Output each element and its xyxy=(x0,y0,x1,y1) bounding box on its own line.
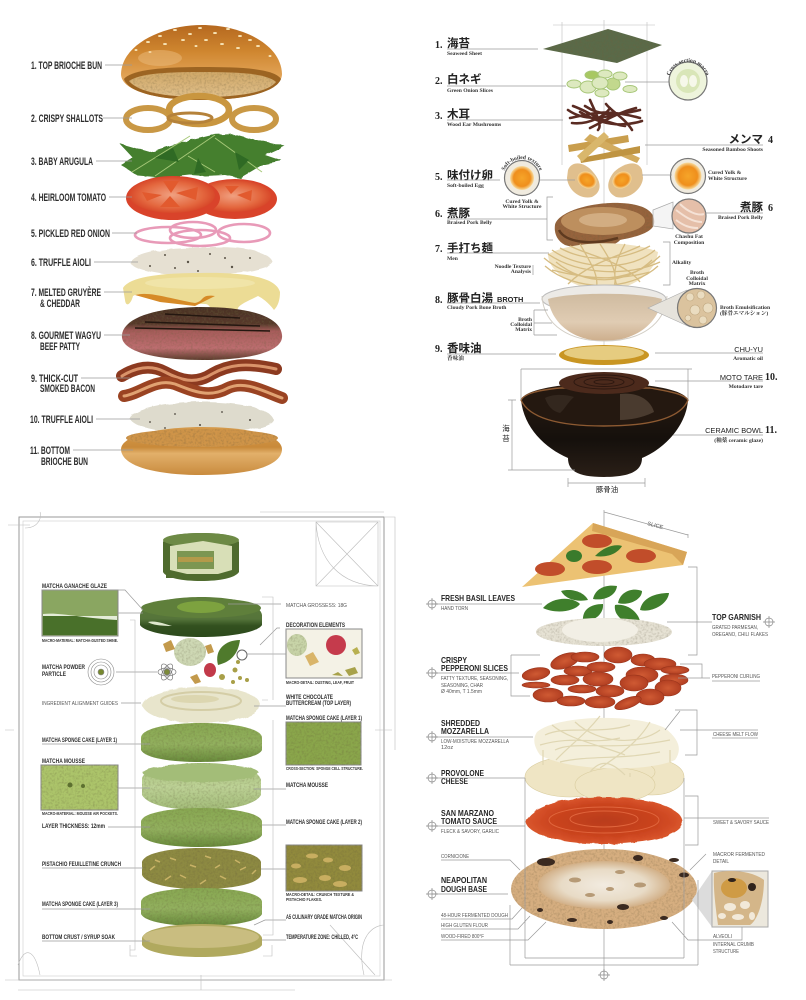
labels: ramen right: Matrix xyxy=(689,281,706,287)
inset: crunch macro xyxy=(286,845,362,891)
inset: sponge macro xyxy=(286,722,361,765)
icon: soft-boiled egg halves xyxy=(567,163,643,198)
labels: matcha: MATCHA MOUSSE xyxy=(286,782,328,789)
icon: cut matcha mini cake xyxy=(163,533,239,581)
labels: burger: 4. HEIRLOOM TOMATO xyxy=(31,192,106,204)
labels: pizza: 12oz xyxy=(441,745,453,751)
labels: pizza: FRESH BASIL LEAVES xyxy=(441,594,515,603)
labels: matcha: BUTTERCREAM (TOP LAYER) xyxy=(286,700,351,707)
labels: matcha: MACRO-DETAIL: CRUNCH TEXTURE & xyxy=(286,892,355,897)
labels: pizza: SLICE xyxy=(646,521,664,531)
icon: crispy shallots xyxy=(126,96,276,130)
labels: ramen right: Cross-section macro xyxy=(666,58,708,76)
labels: burger: 10. TRUFFLE AIOLI xyxy=(30,414,93,426)
labels: ramen right: Seasoned Bamboo Shoots xyxy=(702,147,764,153)
labels: matcha: MATCHA SPONGE CAKE (LAYER 2) xyxy=(286,819,362,826)
labels: ramen right: 海 xyxy=(502,424,510,433)
icon: ceramic bowl with tare xyxy=(521,372,688,477)
labels: pizza: TOP GARNISH xyxy=(712,613,761,622)
labels: matcha: PARTICLE xyxy=(42,671,66,678)
labels: pizza: SHREDDED xyxy=(441,719,480,728)
panel: pizza xyxy=(426,510,775,981)
labels: ramen right: Noodle Texture xyxy=(495,264,532,270)
labels: ramen right: 11. xyxy=(765,425,777,436)
labels: matcha: CROSS-SECTION: SPONGE CELL STRUCTURE. xyxy=(286,766,363,771)
icon: matcha ganache glaze layer xyxy=(140,597,262,637)
labels: burger: 2. CRISPY SHALLOTS xyxy=(31,113,103,125)
labels: burger: 8. GOURMET WAGYU xyxy=(31,330,101,342)
labels: pizza: SEASONING, CHAR xyxy=(441,683,483,689)
labels: ramen left: 1. xyxy=(435,40,443,51)
labels: ramen right: CHU-YU xyxy=(734,345,763,354)
icon: seasoned bamboo shoots xyxy=(568,132,640,163)
labels: ramen right: Broth xyxy=(518,317,533,323)
labels: ramen left: 7. xyxy=(435,244,443,255)
icon: heirloom tomato xyxy=(126,176,277,220)
labels: ramen left: Seaweed Sheet xyxy=(447,51,482,57)
labels: pizza: FATTY TEXTURE, SEASONING, xyxy=(441,676,508,682)
icon: top garnish grated xyxy=(536,618,672,646)
labels: ramen right: Colloidal xyxy=(686,276,708,282)
labels: pizza: HAND TORN xyxy=(441,606,468,612)
labels: ramen right: MOTO TARE xyxy=(720,373,763,382)
labels: matcha: MATCHA GANACHE GLAZE xyxy=(42,583,107,590)
icon: pickled red onion xyxy=(135,222,270,246)
icon: baby arugula xyxy=(119,134,285,178)
labels: matcha: PISTACHIO FEUILLETINE CRUNCH xyxy=(42,861,121,868)
labels: pizza: DETAIL xyxy=(713,859,729,865)
icon: neapolitan dough base xyxy=(511,849,697,929)
labels: pizza: CRISPY xyxy=(441,656,467,665)
icon: gourmet wagyu beef patty xyxy=(122,307,282,360)
icon: truffle aioli xyxy=(130,248,273,276)
labels: ramen left: 6. xyxy=(435,209,443,220)
labels: ramen right: Braised Pork Belly xyxy=(718,215,763,221)
icon: egg macro right xyxy=(670,158,706,194)
labels: ramen right: (豚骨エマルション) xyxy=(720,309,768,317)
labels: pizza: OREGANO, CHILI FLAKES xyxy=(712,632,768,638)
labels: ramen left: 煮豚 xyxy=(447,206,470,220)
labels: ramen left: Wood Ear Mushrooms xyxy=(447,122,502,128)
icon: thick-cut smoked bacon xyxy=(122,365,282,398)
labels: ramen right: Broth Emulsification xyxy=(720,305,771,311)
labels: ramen right: Broth xyxy=(690,270,705,276)
labels: ramen right: Cured Yolk & xyxy=(708,170,742,176)
labels: pizza: WOOD-FIRED 800°F xyxy=(441,934,484,940)
icon: provolone cheese xyxy=(525,757,684,802)
labels: burger xyxy=(30,60,140,468)
labels: pizza: FLECK & SAVORY, GARLIC xyxy=(441,829,499,835)
icon: crispy pepperoni slices xyxy=(521,647,689,712)
labels: ramen left: 白ネギ xyxy=(447,72,482,86)
labels: matcha: DECORATION ELEMENTS xyxy=(286,622,345,629)
icon: shredded mozzarella xyxy=(534,716,679,777)
labels: matcha: TEMPERATURE ZONE: CHILLED, 4°C xyxy=(286,934,358,941)
labels: burger: 11. BOTTOM xyxy=(30,445,70,457)
labels: ramen right: (釉薬 ceramic glaze) xyxy=(714,436,763,444)
labels: ramen right: 4 xyxy=(768,135,773,146)
icon: powder particle target xyxy=(88,659,114,685)
icon: decoration elements xyxy=(158,638,249,684)
labels: burger: 5. PICKLED RED ONION xyxy=(31,228,110,240)
labels: ramen right: Soft-boiled texture xyxy=(502,155,542,171)
labels: pizza: NEAPOLITAN xyxy=(441,876,487,885)
labels: ramen right: White Structure xyxy=(503,204,542,210)
labels: ramen left: 5. xyxy=(435,172,443,183)
icon: matcha sponge layer 2 xyxy=(141,808,262,847)
labels: matcha: A5 CULINARY GRADE MATCHA ORIGIN xyxy=(286,914,362,921)
labels: pizza: TOMATO SAUCE xyxy=(441,817,497,826)
labels: ramen left: 手打ち麺 xyxy=(447,241,493,255)
labels: burger: 9. THICK-CUT xyxy=(31,373,78,385)
labels: ramen left: 9. xyxy=(435,344,443,355)
inset: decoration macro xyxy=(286,629,362,678)
labels: matcha: LAYER THICKNESS: 12mm xyxy=(42,823,105,830)
icon: noodles xyxy=(544,243,660,292)
labels: pizza: Ø 40mm, T 1.5mm xyxy=(441,689,482,695)
labels: ramen right: Composition xyxy=(674,240,705,246)
panel: matcha cake xyxy=(5,512,395,990)
labels: ramen left: Soft-boiled Egg xyxy=(447,183,484,189)
inset: mousse macro xyxy=(41,765,118,810)
labels: ramen left: BROTH xyxy=(497,295,523,304)
icon: top brioche bun xyxy=(121,25,282,100)
labels: pizza: GRATED PARMESAN, xyxy=(712,625,758,631)
labels: ramen right: 苔 xyxy=(502,434,510,443)
labels: matcha: MACRO-DETAIL: DUSTING, LEAF, FRUIT xyxy=(286,680,354,685)
labels: ramen right: Alkality xyxy=(672,260,691,266)
labels: ramen left xyxy=(435,36,575,362)
labels: pizza: ALVEOLI xyxy=(713,934,732,940)
labels: ramen right: Aromatic oil xyxy=(733,356,763,362)
icon: fresh basil leaves xyxy=(543,586,669,626)
icon: bottom brioche bun xyxy=(121,427,282,475)
labels: burger: BEEF PATTY xyxy=(40,341,80,353)
labels: matcha: PISTACHIO FLAKES. xyxy=(286,897,322,902)
labels: ramen right: White Structure xyxy=(708,176,747,182)
labels: matcha: MACRO-MATERIAL: MATCHA-DUSTED SHINE. xyxy=(42,638,118,643)
labels: burger: 6. TRUFFLE AIOLI xyxy=(31,257,91,269)
labels: ramen right: Cured Yolk & xyxy=(505,199,539,205)
labels: ramen right: Matrix xyxy=(515,327,532,333)
labels: ramen left: Cloudy Pork Bone Broth xyxy=(447,305,507,311)
labels: ramen left: 味付け卵 xyxy=(447,168,493,182)
labels: pizza: INTERNAL CRUMB xyxy=(713,942,754,948)
icon: pistachio feuilletine crunch xyxy=(142,848,261,889)
guide lines xyxy=(553,20,655,345)
labels: ramen left: 8. xyxy=(435,295,443,306)
icon: egg macro left xyxy=(504,160,540,196)
labels: matcha: MATCHA SPONGE CAKE (LAYER 1) xyxy=(286,715,362,722)
icon: pepperoni pizza slice xyxy=(522,523,687,587)
labels: ramen right: 6 xyxy=(768,203,773,214)
labels: pizza: CHEESE xyxy=(441,777,468,786)
icon: matcha sponge layer 3 xyxy=(141,888,262,926)
icon: white chocolate buttercream xyxy=(142,687,261,723)
labels: burger: BRIOCHE BUN xyxy=(41,456,88,468)
icon: braised pork belly xyxy=(555,203,654,248)
labels: matcha: MACRO-MATERIAL: MOUSSE AIR POCKETS. xyxy=(42,811,118,816)
icon: aromatic oil disc xyxy=(559,345,649,365)
labels: matcha: MATCHA MOUSSE xyxy=(42,758,85,765)
labels: ramen right xyxy=(494,58,778,494)
icon: bottom crust xyxy=(142,924,262,957)
labels: ramen left: 2. xyxy=(435,76,443,87)
labels: pizza: STRUCTURE xyxy=(713,949,739,955)
guide lines pizza xyxy=(604,510,688,975)
labels: burger: 1. TOP BRIOCHE BUN xyxy=(31,60,102,72)
icon: truffle aioli bottom xyxy=(130,402,274,434)
labels: pizza xyxy=(432,521,769,965)
panel: ramen xyxy=(435,20,778,494)
labels: ramen left: Men xyxy=(447,256,459,262)
labels: ramen right: 豚骨油 xyxy=(596,485,618,494)
labels: pizza: HIGH GLUTEN FLOUR xyxy=(441,923,488,929)
labels: ramen left: 木耳 xyxy=(447,107,470,121)
labels: pizza: LOW-MOISTURE MOZZARELLA xyxy=(441,739,509,745)
labels: matcha: MATCHA SPONGE CAKE (LAYER 1) xyxy=(42,737,117,744)
labels: matcha: INGREDIENT ALIGNMENT GUIDES xyxy=(42,701,118,707)
icon: registration crosshairs xyxy=(426,598,775,981)
icon: melted gruyere and cheddar xyxy=(123,273,280,322)
labels: pizza: SAN MARZANO xyxy=(441,809,495,818)
labels: ramen right: CERAMIC BOWL xyxy=(705,426,763,435)
labels: pizza: MACROR FERMENTED xyxy=(713,852,765,858)
icon: wood ear mushrooms xyxy=(568,100,642,130)
icon: green onion slices xyxy=(567,70,637,97)
labels: ramen left: Braised Pork Belly xyxy=(447,220,492,226)
labels: matcha: MATCHA SPONGE CAKE (LAYER 3) xyxy=(42,901,118,908)
labels: pizza: MOZZARELLA xyxy=(441,727,489,736)
icon: pork macro xyxy=(653,199,706,233)
labels: matcha: MATCHA POWDER xyxy=(42,664,85,671)
labels: pizza: PROVOLONE xyxy=(441,769,484,778)
labels: pizza: PEPPERONI CURLING xyxy=(712,674,760,680)
labels: burger: 3. BABY ARUGULA xyxy=(31,156,93,168)
labels: matcha: MATCHA GROSSESS: 18G xyxy=(286,603,347,609)
labels: pizza: CORNICIONE xyxy=(441,854,469,860)
labels: ramen right: Analysis xyxy=(511,269,532,275)
icon: seaweed sheet xyxy=(543,29,662,63)
inset: glaze macro xyxy=(42,590,118,636)
labels: pizza: SWEET & SAVORY SAUCE xyxy=(713,820,769,826)
icon: matcha mousse layer xyxy=(142,763,261,810)
panel: burger xyxy=(30,25,285,475)
labels: ramen right: 10. xyxy=(765,372,778,383)
icon: broth macro xyxy=(648,288,716,328)
labels: pizza: PEPPERONI SLICES xyxy=(441,664,508,673)
labels: pizza: CHEESE MELT FLOW xyxy=(713,732,759,738)
labels: ramen left: 香味油 xyxy=(447,341,482,355)
labels: matcha: BOTTOM CRUST / SYRUP SOAK xyxy=(42,934,115,941)
labels: ramen left: 香味油 xyxy=(447,354,464,362)
icon: matcha sponge layer 1 xyxy=(141,723,262,762)
labels: ramen right: Motodare tare xyxy=(729,384,764,390)
labels: pizza: 48-HOUR FERMENTED DOUGH xyxy=(441,913,508,919)
icon: cloudy broth bowl xyxy=(542,285,667,341)
labels: ramen left: 豚骨白湯 xyxy=(447,291,493,305)
icon: cross-section macro onion xyxy=(625,62,707,100)
labels: ramen right: Chashu Fat xyxy=(675,234,703,240)
labels: burger: 7. MELTED GRUYÈRE xyxy=(31,286,101,299)
labels: ramen left: Green Onion Slices xyxy=(447,88,494,94)
labels: pizza: DOUGH BASE xyxy=(441,885,487,894)
labels: ramen right: 煮豚 xyxy=(740,200,763,214)
blueprint frame xyxy=(5,512,395,990)
labels: matcha: WHITE CHOCOLATE xyxy=(286,694,333,701)
inset: alveoli crumb structure xyxy=(692,871,768,927)
labels: burger: & CHEDDAR xyxy=(40,298,80,310)
labels: ramen left: 3. xyxy=(435,111,443,122)
labels: burger: SMOKED BACON xyxy=(40,383,95,395)
labels: ramen left: 海苔 xyxy=(447,36,470,50)
icon: san marzano tomato sauce xyxy=(526,797,683,844)
labels: matcha xyxy=(42,583,363,956)
labels: ramen right: Colloidal xyxy=(510,322,532,328)
labels: ramen right: メンマ xyxy=(728,134,763,146)
